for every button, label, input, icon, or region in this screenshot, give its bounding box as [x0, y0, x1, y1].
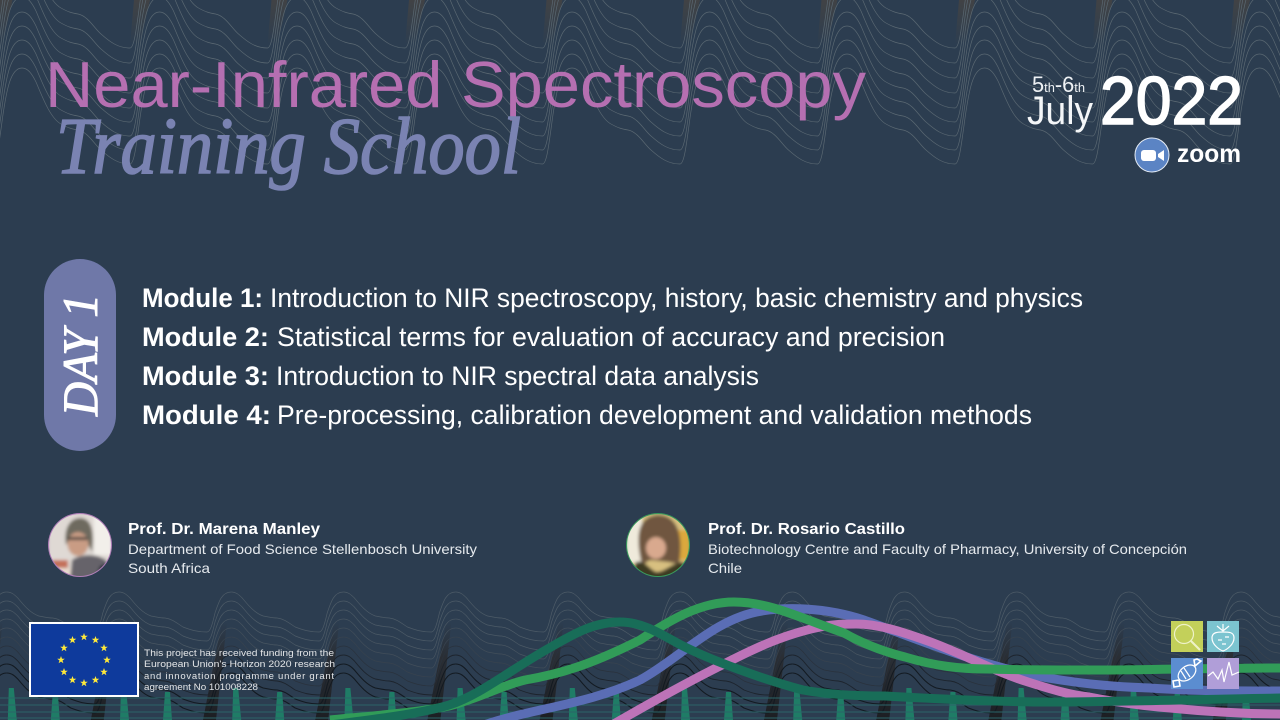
EU flag	[30, 623, 138, 696]
speaker text: Rosario Castillo: Prof. Dr. Rosario Castillo	[708, 521, 905, 538]
module 1: Introduction to NIR spectroscopy, history, basic chemistry and physics	[270, 283, 1083, 313]
speaker text: Rosario Castillo	[708, 521, 1187, 576]
module 2: Module 2:	[142, 322, 269, 352]
module list	[142, 283, 1083, 430]
theme icons	[1171, 621, 1239, 689]
icon: zoom camera	[1135, 138, 1169, 172]
speaker text: Marena Manley	[128, 521, 477, 576]
funding statement: agreement No 101008228	[144, 682, 258, 693]
funding statement: European Union's Horizon 2020 research	[144, 659, 335, 670]
curve: blue	[484, 609, 1280, 720]
funding statement: This project has received funding from the	[144, 648, 334, 659]
speaker text: Rosario Castillo: Chile	[708, 560, 742, 576]
day pill	[44, 259, 116, 451]
curve: pink	[612, 624, 1280, 720]
bottom spectral line pattern	[0, 592, 1280, 720]
icon: magnifier	[1171, 621, 1203, 652]
title: Near-Infrared Spectroscopy	[45, 48, 867, 121]
icon: beet	[1207, 621, 1239, 652]
module 2: Statistical terms for evaluation of accuracy and precision	[277, 322, 945, 352]
date: month: July	[1027, 89, 1093, 133]
module 4: Pre-processing, calibration development and validation methods	[277, 400, 1032, 430]
funding statement: and innovation programme under grant	[144, 671, 334, 682]
speaker text: Rosario Castillo: Biotechnology Centre and Faculty of Pharmacy, University of Concepción	[708, 541, 1187, 557]
speaker text: Marena Manley: Department of Food Science Stellenbosch University	[128, 541, 477, 557]
icon: pulse	[1207, 658, 1239, 689]
speaker photo: Rosario Castillo	[626, 513, 690, 580]
icon: candy	[1171, 658, 1203, 689]
subtitle: Training School	[56, 103, 521, 191]
date and platform block	[1027, 63, 1243, 172]
speaker text: Marena Manley: South Africa	[128, 560, 210, 576]
date: days: 5th-6th	[1032, 72, 1085, 97]
speaker photo: Marena Manley	[48, 513, 112, 580]
spectrum curves	[330, 602, 1280, 720]
zoom wordmark: zoom	[1177, 140, 1241, 168]
module 3: Module 3:	[142, 361, 269, 391]
module 3: Introduction to NIR spectral data analysis	[276, 361, 759, 391]
speaker text: Marena Manley: Prof. Dr. Marena Manley	[128, 521, 320, 538]
funding statement	[144, 648, 335, 693]
curve: dark green	[330, 622, 1280, 720]
curve: bright green	[330, 602, 1280, 720]
module 1: Module 1:	[142, 283, 263, 313]
module 4: Module 4:	[142, 400, 271, 430]
day label: DAY 1	[52, 294, 108, 417]
top spectral line pattern	[0, 0, 1280, 164]
date: year: 2022	[1100, 63, 1243, 139]
